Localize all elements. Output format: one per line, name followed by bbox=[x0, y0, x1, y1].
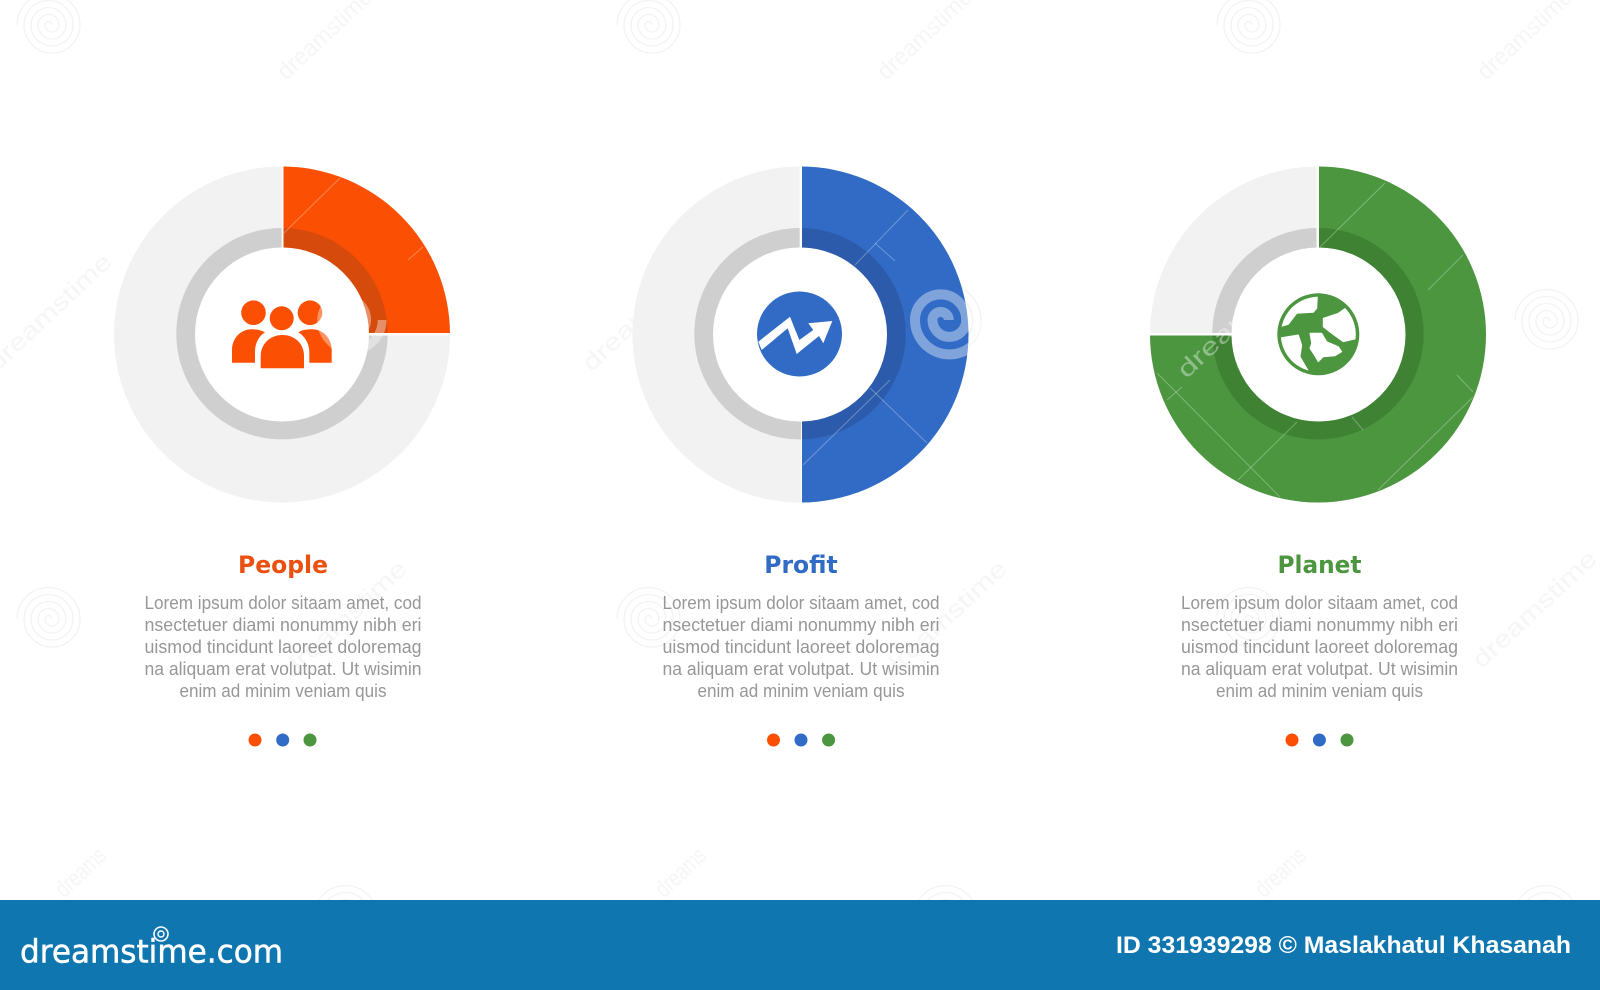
text block: profit description bbox=[662, 593, 940, 701]
indicator dots bbox=[767, 734, 835, 746]
text block: planet description: nsectetuer diami nonummy nibh eri bbox=[1181, 615, 1458, 635]
watermark pattern on white: dreamstime bbox=[1467, 545, 1600, 674]
text block: planet description bbox=[1181, 593, 1458, 701]
donut chart: planet 75 percent bbox=[1150, 166, 1486, 502]
watermark pattern on white: dreamstime bbox=[877, 555, 1013, 684]
text block: profit description: na aliquam erat volutpat. Ut wisimin bbox=[662, 659, 940, 679]
text block: people description: uismod tincidunt laoreet doloremag bbox=[144, 637, 422, 657]
text block: planet description: enim ad minim veniam quis bbox=[1216, 681, 1423, 701]
watermark pattern on white: dreams bbox=[650, 842, 712, 903]
image credit: ID 331939298 © Maslakhatul Khasanah bbox=[1116, 932, 1571, 959]
panel: people bbox=[114, 166, 451, 746]
footer band bbox=[0, 900, 1600, 990]
donut chart: people 25 percent bbox=[114, 166, 451, 502]
text block: profit description: nsectetuer diami nonummy nibh eri bbox=[662, 615, 940, 635]
icon: globe bbox=[1277, 293, 1360, 376]
icon: people bbox=[232, 300, 332, 368]
text block: profit description: uismod tincidunt laoreet doloremag bbox=[662, 637, 940, 657]
text block: people description: nsectetuer diami nonummy nibh eri bbox=[144, 615, 422, 635]
heading: Planet: Planet bbox=[1278, 551, 1362, 579]
watermark overlay on coloured shapes bbox=[322, 245, 1318, 384]
text block: profit description: enim ad minim veniam quis bbox=[698, 681, 904, 701]
heading: Profit: Profit bbox=[764, 551, 838, 579]
panel: planet bbox=[1150, 166, 1486, 746]
indicator dots bbox=[1286, 734, 1354, 746]
text block: profit description: Lorem ipsum dolor sitaam amet, cod bbox=[662, 593, 940, 613]
text block: people description: enim ad minim veniam quis bbox=[180, 681, 386, 701]
text block: planet description: Lorem ipsum dolor sitaam amet, cod bbox=[1181, 593, 1458, 613]
logo: dreamstime.com: dreamstime.com bbox=[20, 932, 283, 970]
watermark pattern on white: dreamstime bbox=[277, 555, 413, 684]
watermark pattern on white: dreamstime bbox=[577, 248, 713, 377]
watermark overlay on coloured shapes: dreamstime bbox=[1172, 245, 1318, 384]
text block: planet description: uismod tincidunt laoreet doloremag bbox=[1181, 637, 1458, 657]
heading: People: People bbox=[238, 551, 328, 579]
text block: people description: na aliquam erat volutpat. Ut wisimin bbox=[144, 659, 422, 679]
watermark pattern on white: dreams bbox=[1250, 842, 1312, 903]
donut chart: profit 50 percent bbox=[632, 166, 968, 503]
text block: planet description: na aliquam erat volutpat. Ut wisimin bbox=[1181, 659, 1458, 679]
panel: profit bbox=[632, 166, 968, 746]
icon: growth arrow bbox=[757, 292, 842, 376]
watermark pattern on white: dreams bbox=[50, 842, 112, 903]
text block: people description bbox=[144, 593, 422, 701]
text block: people description: Lorem ipsum dolor sitaam amet, cod bbox=[144, 593, 422, 613]
indicator dots bbox=[248, 734, 316, 746]
